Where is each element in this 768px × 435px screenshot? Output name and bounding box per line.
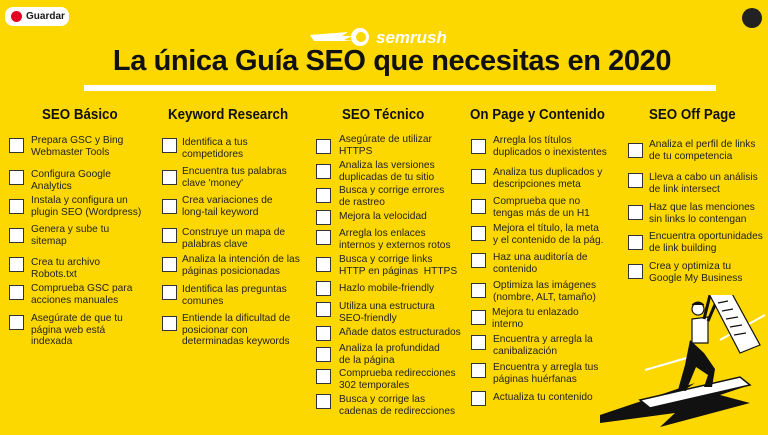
panel: SEO Técnico: de la página	[339, 354, 395, 366]
panel: SEO Técnico: Analiza la profundidad	[339, 343, 440, 354]
panel: SEO Técnico: SEO-friendly	[339, 312, 397, 324]
panel: On Page y Contenido: interno	[492, 318, 523, 330]
panel: On Page y Contenido: contenido	[493, 264, 537, 274]
panel: SEO Técnico: internos y externos rotos	[339, 240, 451, 250]
panel: On Page y Contenido: páginas huérfanas	[493, 374, 577, 384]
panel: Keyword Research: competidores	[182, 148, 243, 160]
panel: SEO Técnico: Analiza las versiones	[339, 160, 435, 171]
panel: SEO Off Page	[628, 139, 763, 284]
panel: SEO Técnico: HTTPS	[339, 146, 372, 156]
panel: SEO Off Page: sin links lo contengan	[649, 214, 746, 224]
panel: Keyword Research: páginas posicionadas	[182, 266, 280, 276]
panel: Keyword Research: Identifica las preguntas	[182, 284, 287, 295]
panel: On Page y Contenido	[471, 135, 607, 406]
panel: SEO Técnico: Asegúrate de utilizar	[339, 134, 432, 145]
panel: SEO Básico: Prepara GSC y Bing	[31, 135, 123, 146]
panel: On Page y Contenido: duplicados o inexistentes	[493, 146, 607, 158]
panel: SEO Técnico: Busca y corrige errores	[339, 185, 444, 196]
panel: On Page y Contenido: Encuentra y arregla tus	[493, 362, 598, 373]
panel: On Page y Contenido: Haz una auditoría de	[493, 252, 588, 263]
panel: SEO Técnico: Añade datos estructurados	[339, 327, 461, 338]
illustration: man with checklist on lightning	[600, 295, 766, 427]
panel: SEO Básico: página web está	[31, 324, 105, 336]
panel: Keyword Research	[162, 137, 300, 347]
logo: semrush	[310, 28, 447, 47]
panel: Keyword Research: comunes	[182, 296, 223, 306]
panel: SEO Off Page: Crea y optimiza tu	[649, 261, 731, 272]
panel: Keyword Research: posicionar con	[182, 324, 248, 336]
panel: On Page y Contenido: Encuentra y arregla la	[493, 334, 593, 345]
panel: Keyword Research: Entiende la dificultad de	[182, 313, 290, 324]
button: Guardar: Guardar	[26, 11, 65, 22]
panel: Keyword Research: Construye un mapa de	[182, 227, 285, 238]
underline bar	[84, 85, 716, 91]
panel: SEO Básico: Asegúrate de que tu	[31, 313, 123, 324]
panel: On Page y Contenido: canibalización	[493, 346, 557, 356]
panel: On Page y Contenido: Actualiza tu contenido	[493, 392, 593, 403]
panel: SEO Técnico: 302 temporales	[339, 380, 409, 390]
panel: On Page y Contenido: (nombre, ALT, tamaño)	[493, 292, 596, 302]
heading: SEO Básico: SEO Básico	[42, 107, 118, 123]
panel: Keyword Research: determinadas keywords	[182, 336, 290, 347]
panel: SEO Off Page: de link intersect	[649, 184, 720, 194]
panel: SEO Técnico: HTTP en páginas HTTPS	[339, 266, 457, 276]
panel: SEO Básico: plugin SEO (Wordpress)	[31, 206, 141, 218]
panel: SEO Técnico: Arregla los enlaces	[339, 228, 426, 239]
panel: Keyword Research: clave 'money'	[182, 178, 243, 188]
panel: SEO Off Page: Lleva a cabo un análisis	[649, 172, 758, 183]
panel: Keyword Research: Analiza la intención de las	[182, 254, 300, 265]
panel: SEO Básico: Webmaster Tools	[31, 146, 109, 158]
heading: SEO Off Page: SEO Off Page	[649, 107, 736, 123]
panel: SEO Básico: Configura Google	[31, 169, 111, 180]
panel: SEO Básico	[9, 135, 141, 347]
panel: SEO Off Page: Analiza el perfil de links	[649, 139, 755, 150]
panel: SEO Off Page: Haz que las menciones	[649, 202, 755, 213]
panel: Keyword Research: palabras clave	[182, 238, 248, 250]
panel: SEO Off Page: de tu competencia	[649, 150, 732, 162]
panel: SEO Técnico: Comprueba redirecciones	[339, 368, 456, 379]
panel: SEO Off Page: Google My Business	[649, 272, 742, 284]
panel: SEO Básico: acciones manuales	[31, 294, 118, 306]
panel: SEO Básico: Instala y configura un	[31, 195, 128, 206]
panel: SEO Técnico: Mejora la velocidad	[339, 211, 427, 222]
panel: SEO Técnico: cadenas de redirecciones	[339, 406, 455, 416]
panel: SEO Técnico: duplicadas de tu sitio	[339, 172, 434, 182]
title: La única Guía SEO que necesitas en 2020	[113, 45, 671, 77]
panel: SEO Técnico: Busca y corrige links	[339, 254, 432, 265]
logo: semrush: semrush	[376, 28, 447, 47]
panel: SEO Técnico	[316, 134, 461, 416]
panel: On Page y Contenido: Comprueba que no	[493, 196, 580, 207]
panel: SEO Off Page: Encuentra oportunidades	[649, 231, 763, 242]
panel: SEO Off Page: de link building	[649, 242, 716, 254]
panel: On Page y Contenido: y el contenido de la pág.	[493, 234, 603, 246]
panel: SEO Técnico: Busca y corrige las	[339, 394, 425, 405]
panel: SEO Básico: Comprueba GSC para	[31, 283, 132, 294]
panel: On Page y Contenido: Analiza tus duplicados y	[493, 167, 602, 178]
panel: On Page y Contenido: descripciones meta	[493, 178, 581, 190]
panel: Keyword Research: Encuentra tus palabras	[182, 166, 287, 177]
panel: SEO Técnico: de rastreo	[339, 196, 385, 208]
panel: SEO Básico: sitemap	[31, 236, 67, 246]
panel: SEO Técnico: Hazlo mobile-friendly	[339, 283, 434, 294]
panel: On Page y Contenido: Arregla los títulos	[493, 135, 572, 146]
icon: pinterest	[11, 11, 22, 22]
panel: SEO Básico: Genera y sube tu	[31, 224, 109, 235]
panel: On Page y Contenido: Optimiza las imágenes	[493, 280, 596, 291]
panel: SEO Básico: Analytics	[31, 180, 72, 192]
button: Guardar	[5, 7, 69, 26]
panel: On Page y Contenido: Mejora el título, la meta	[493, 223, 599, 234]
panel: SEO Básico: Crea tu archivo	[31, 257, 100, 268]
icon: lens	[742, 8, 762, 28]
panel: Keyword Research: Identifica a tus	[182, 137, 248, 148]
panel: SEO Técnico: Utiliza una estructura	[339, 301, 435, 312]
heading: On Page y Contenido: On Page y Contenido	[470, 107, 605, 123]
heading: SEO Técnico: SEO Técnico	[342, 107, 424, 123]
heading: Keyword Research: Keyword Research	[168, 107, 288, 123]
panel: SEO Básico: indexada	[31, 336, 72, 347]
panel: On Page y Contenido: tengas más de un H1	[493, 208, 590, 218]
panel: SEO Básico: Robots.txt	[31, 268, 77, 280]
panel: Keyword Research: Crea variaciones de	[182, 195, 273, 206]
panel: On Page y Contenido: Mejora tu enlazado	[492, 307, 579, 318]
panel: Keyword Research: long-tail keyword	[182, 206, 258, 218]
